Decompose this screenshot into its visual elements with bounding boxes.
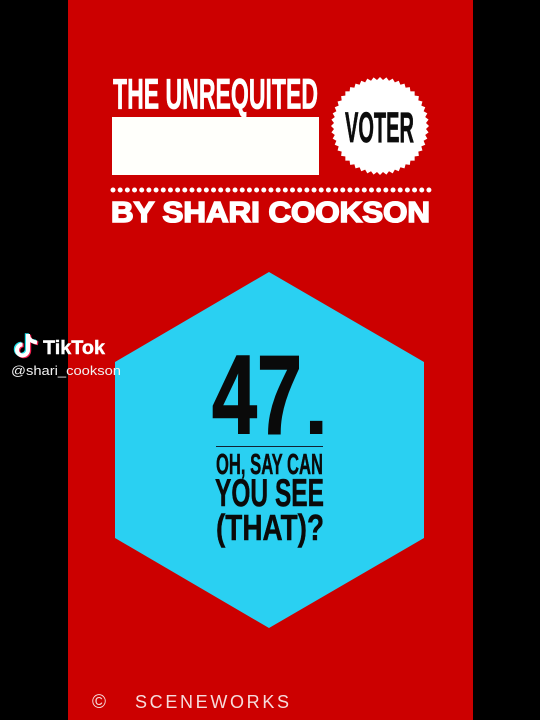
badge: Voter starburst xyxy=(331,77,429,175)
byline: BY SHARI COOKSON xyxy=(111,197,430,229)
episode title xyxy=(215,449,324,548)
TikTok wordmark: TikTok xyxy=(43,338,105,359)
credit: Sceneworks: SCENEWORKS xyxy=(135,692,289,712)
rule under number xyxy=(216,446,323,448)
icon: TikTok note xyxy=(16,333,38,356)
panel: red background xyxy=(68,0,473,720)
white title box xyxy=(112,117,319,175)
episode number: 47 xyxy=(212,332,302,458)
dotted divider xyxy=(113,188,429,192)
badge: Voter starburst: VOTER xyxy=(345,104,414,152)
panel: blue hexagon xyxy=(115,272,424,628)
episode title: YOU SEE xyxy=(215,472,324,515)
title: The Unrequited: THE UNREQUITED xyxy=(113,70,318,118)
episode title: OH, SAY CAN xyxy=(216,449,323,481)
episode title: (THAT)? xyxy=(216,507,324,548)
copyright symbol: © xyxy=(92,692,106,713)
TikTok handle: @shari_cookson xyxy=(11,363,121,378)
episode number: . xyxy=(304,354,328,453)
